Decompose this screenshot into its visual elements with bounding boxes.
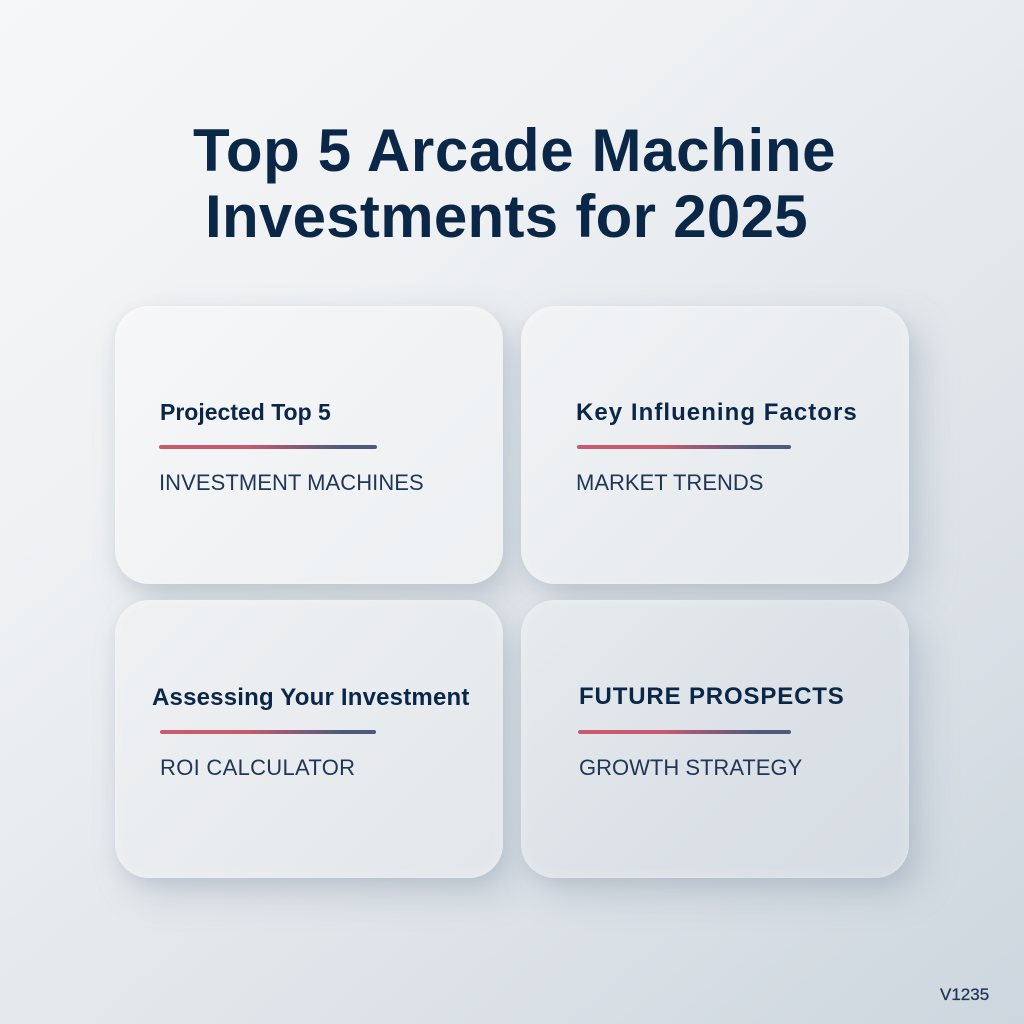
title: Top 5 Arcade Machine	[193, 117, 836, 184]
divider: key factors	[577, 445, 791, 449]
heading: future prospects: FUTURE PROSPECTS	[579, 683, 845, 710]
text: investment machines: INVESTMENT MACHINES	[159, 470, 424, 495]
version label: V1235	[940, 985, 989, 1004]
heading: assessing your investment: Assessing Your Investment	[152, 684, 470, 711]
panel: key influencing factors	[521, 306, 909, 584]
divider: projected top 5	[159, 445, 377, 449]
panel: projected top 5	[115, 306, 503, 584]
divider: future prospects	[578, 730, 791, 734]
panel: future prospects	[521, 600, 909, 878]
divider: assessing	[160, 730, 376, 734]
heading: projected top 5: Projected Top 5	[160, 399, 331, 425]
panel: assessing your investment	[115, 600, 503, 878]
text: market trends: MARKET TRENDS	[576, 470, 763, 495]
title	[193, 117, 836, 250]
text: roi calculator: ROI CALCULATOR	[160, 755, 355, 780]
heading: key influening factors: Key Influening Factors	[576, 399, 858, 426]
text: growth strategy: GROWTH STRATEGY	[579, 755, 802, 780]
title: Investments for 2025	[205, 183, 808, 250]
